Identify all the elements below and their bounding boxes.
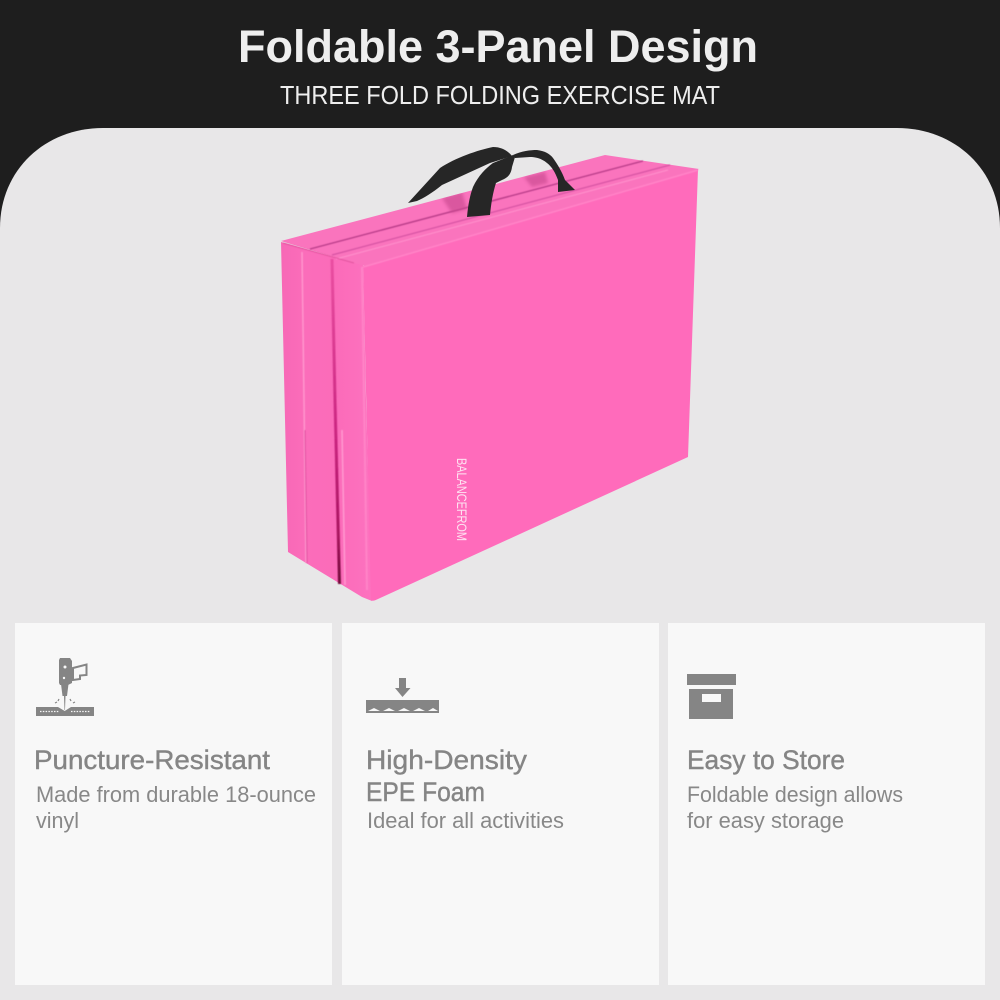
heading: High-Density [366, 745, 528, 775]
header band [0, 0, 1000, 240]
description: for easy storage [687, 808, 844, 833]
mat top face [281, 155, 699, 266]
heading: EPE Foam [366, 777, 485, 807]
front strap [467, 155, 515, 217]
card: puncture-resistant [15, 623, 332, 985]
icon: drill [36, 658, 94, 716]
mat grooves and seams [283, 161, 698, 590]
description: Ideal for all activities [367, 808, 564, 833]
back strap [408, 147, 512, 203]
description: Foldable design allows [687, 782, 903, 807]
icon: storage box [687, 674, 736, 719]
description: Made from durable 18-ounce [36, 782, 316, 807]
right strap loop [513, 150, 575, 192]
description: vinyl [36, 808, 79, 833]
mat left folded side [281, 242, 372, 601]
heading: Easy to Store [687, 745, 845, 775]
card: easy to store [668, 623, 985, 985]
description [687, 782, 903, 833]
description [36, 782, 316, 833]
brand label: BALANCEFROM [454, 458, 469, 541]
handle slot shadows [442, 172, 548, 213]
title: Foldable 3-Panel Design [238, 21, 758, 72]
black carrying handle [408, 147, 575, 217]
subtitle: THREE FOLD FOLDING EXERCISE MAT [280, 80, 720, 110]
heading: Puncture-Resistant [34, 745, 271, 775]
product: folded pink mat [281, 147, 699, 601]
card: high-density foam [342, 623, 659, 985]
mat front face [363, 169, 698, 601]
heading [366, 745, 528, 807]
icon: foam compression [366, 678, 439, 713]
